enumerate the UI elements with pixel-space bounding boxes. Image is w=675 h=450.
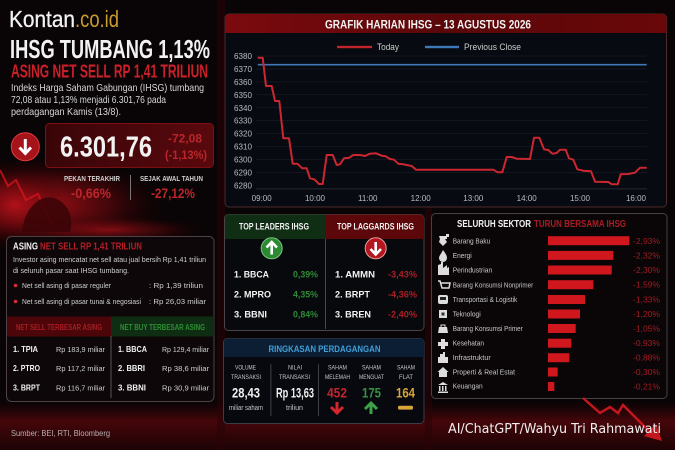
row: infrastruktur: Infrastruktur [453,353,491,362]
x axis labels: 12:00 [411,194,431,203]
stat: saham flat: SAHAM [397,364,415,372]
logo: .co.id [75,6,119,32]
leaders column: TOP LEADERS IHSG [239,222,309,232]
y axis labels: 6380 [234,52,253,61]
y axis labels: 6290 [234,168,253,177]
source: Sumber: BEI, RTI, Bloomberg [11,429,110,438]
legend: Today [377,42,399,52]
table: net buy terbesar: Rp 38,6 miliar [162,364,209,373]
y axis labels: 6370 [234,65,253,74]
leaders column: 4,35% [293,290,318,300]
bullet: reguler: Net sell asing di pasar reguler [22,281,112,290]
x axis labels [252,194,647,203]
row: barang konsumsi primer: -1,05% [633,324,660,334]
table: net sell terbesar: Rp 183,9 miliar [56,345,105,354]
row: perindustrian [438,262,660,275]
stat: volume transaksi: TRANSAKSI [231,374,261,381]
description: di seluruh pasar saat IHSG tumbang. [13,266,129,275]
table: net sell terbesar: 1. TPIA [13,344,38,354]
leaders column [225,214,325,320]
chart heading: GRAFIK HARIAN IHSG – 13 AGUSTUS 2026 [325,20,531,32]
stat: pekan terakhir: PEKAN TERAKHIR [64,174,120,183]
row: transportasi: Transportasi & Logistik [453,295,517,304]
row: barang konsumsi primer [438,324,660,334]
panel heading: TURUN BERSAMA IHSG [534,219,626,230]
legend: Previous Close [464,42,521,52]
leaders column: 3. BBNI [234,310,267,320]
arrow: falling trend [583,398,662,441]
today line [258,58,647,184]
x axis labels: 10:00 [305,194,326,203]
stat: sejak awal tahun: SEJAK AWAL TAHUN [140,174,203,183]
x axis labels: 11:00 [358,194,378,203]
stat: saham flat: 164 [396,384,415,400]
laggards column: 2. BRPT [335,290,370,300]
heading band [224,338,424,357]
laggards column: -4,36% [388,290,417,300]
intro text: 72,08 atau 1,13% menjadi 6.301,76 pada [11,95,166,106]
row: kesehatan [438,338,660,349]
title: IHSG TUMBANG 1,13% [10,34,210,64]
row: keuangan: Keuangan [453,382,483,391]
y axis labels: 6320 [234,130,253,139]
chart heading [225,14,666,33]
row: barang konsumsi nonprimer: -1,59% [633,280,660,290]
leaders column: 2. MPRO [234,290,271,300]
row: properti: Properti & Real Estat [453,368,516,376]
y axis labels: 6340 [234,104,253,113]
x axis labels: 09:00 [252,194,272,203]
y axis labels: 6280 [234,181,253,190]
panel heading: ASING [13,242,38,252]
row: energi [439,250,660,262]
stat: pekan terakhir: -0,66% [71,185,111,201]
row: keuangan: -0,21% [633,382,660,392]
table: net buy terbesar: 2. BBRI [118,363,145,373]
row: infrastruktur [438,352,660,363]
logo [9,6,119,32]
table: net sell terbesar: 3. BRPT [13,382,41,392]
y axis labels: 6330 [234,117,253,126]
panel: top leaders and laggards [224,214,424,330]
row: barang konsumsi nonprimer: Barang Konsumsi Nonprimer [453,280,534,290]
y axis labels: 6360 [234,78,253,87]
stat: saham menguat: SAHAM [362,364,381,372]
table: net sell terbesar [7,316,111,392]
stat: nilai transaksi [276,364,314,412]
row: perindustrian: Perindustrian [453,266,492,274]
row: teknologi [439,309,660,319]
index value box: 6.301,76 [60,132,152,164]
leaders column: 1. BBCA [234,270,269,280]
table: net sell terbesar: Rp 116,7 miliar [56,384,105,392]
row: properti: -0,30% [633,367,660,377]
x axis labels: 13:00 [463,194,484,203]
heading band: RINGKASAN PERDAGANGAN [268,344,381,355]
row: teknologi: Teknologi [453,310,481,318]
stat: pekan terakhir [64,174,120,201]
description [13,255,206,275]
panel heading [13,242,142,252]
row: infrastruktur: -0,88% [633,353,660,363]
panel: line chart [225,14,666,207]
stat: volume transaksi [229,364,263,412]
row: energi: -2,32% [633,250,660,260]
stat: sejak awal tahun [130,174,203,201]
x axis labels: 14:00 [517,194,537,203]
leaders column: 0,39% [293,270,318,280]
icon: down arrow circle [11,133,39,161]
row: barang baku: Barang Baku [453,236,490,246]
stat: nilai transaksi: triliun [286,405,303,412]
laggards column: 3. BREN [335,310,371,320]
table: net sell terbesar: NET SELL TERBESAR ASING [16,323,102,332]
stat: nilai transaksi: Rp 13,63 [276,384,314,400]
credit: AI/ChatGPT/Wahyu Tri Rahmawati [448,422,661,437]
table: net buy terbesar: Rp 129,4 miliar [162,345,209,354]
y axis labels: 6300 [234,156,253,164]
index value box [46,124,214,168]
row: transportasi: -1,33% [633,294,660,304]
stat: saham melemah: 452 [327,384,347,400]
laggards column: -2,40% [388,310,417,320]
panel: asing net sell [6,236,214,402]
row: perindustrian: -2,30% [633,265,660,275]
leaders column: 0,84% [293,310,318,320]
stat: nilai transaksi: TRANSAKSI [279,374,310,381]
panel heading [457,219,626,230]
stat: saham melemah: SAHAM [328,364,347,372]
panel heading: SELURUH SEKTOR [457,219,532,230]
stat: nilai transaksi: NILAI [288,364,302,372]
description: Investor asing mencatat net sell atau jual bersih Rp 1,41 triliun [13,255,206,264]
stat: volume transaksi: miliar saham [229,405,263,412]
stat: sejak awal tahun: -27,12% [151,185,195,201]
bullet: tunai dan negosiasi [14,297,207,306]
stat: saham menguat [359,364,384,414]
intro text [11,83,204,118]
row: kesehatan: Kesehatan [453,338,484,348]
stat: saham menguat: 175 [362,384,381,400]
x axis labels: 15:00 [570,194,591,203]
previous close line [258,64,647,66]
stat: volume transaksi: 28,43 [232,384,260,400]
index value box: -72,08 [168,132,202,146]
row: barang konsumsi primer: Barang Konsumsi Primer [453,324,523,333]
stat: saham melemah [325,364,350,413]
stat: saham flat: FLAT [399,374,413,381]
row: properti [438,367,660,377]
bullet: tunai dan negosiasi: : Rp 26,03 miliar [149,297,207,306]
bullet: reguler [14,281,203,290]
y axis labels: 6350 [234,91,253,100]
laggards column: TOP LAGGARDS IHSG [337,222,414,232]
row: kesehatan: -0,93% [633,338,660,348]
row: energi: Energi [453,251,472,260]
laggards column: -3,43% [388,270,417,280]
y axis labels [234,52,253,190]
row: keuangan [438,382,660,393]
subtitle: ASING NET SELL RP 1,41 TRILIUN [11,62,208,82]
stat: saham melemah: MELEMAH [325,374,350,381]
table: net sell terbesar: 2. PTRO [13,363,40,373]
panel: ringkasan perdagangan [224,338,424,424]
legend [337,42,521,52]
bullet: reguler: : Rp 1,39 triliun [149,281,203,290]
stat: saham menguat: MENGUAT [359,374,384,381]
table: net sell terbesar: Rp 117,2 miliar [56,364,105,373]
y axis labels: 6310 [234,143,253,152]
table: net buy terbesar: 1. BBCA [118,344,147,354]
panel: sektor [432,214,667,398]
bullet: tunai dan negosiasi: Net sell asing di pasar tunai & negosiasi [22,297,141,306]
stat: saham flat [396,364,415,410]
row: barang baku [439,234,660,246]
x axis labels: 16:00 [626,194,647,203]
row: barang baku: -2,93% [633,236,660,246]
index value box: (-1,13%) [165,148,207,162]
logo: Kontan [9,6,75,32]
table: net buy terbesar: NET BUY TERBESAR ASING [120,323,205,332]
stat: volume transaksi: VOLUME [235,364,257,372]
table: net buy terbesar [110,316,214,398]
intro text: Indeks Harga Saham Gabungan (IHSG) tumbang [11,83,204,94]
laggards column: 1. AMMN [335,270,375,280]
table: net buy terbesar: Rp 30,9 miliar [162,384,209,392]
panel heading: NET SELL RP 1,41 TRILIUN [40,242,142,252]
laggards column [325,214,424,329]
table: net buy terbesar: 3. BBNI [118,382,146,392]
row: teknologi: -1,20% [633,309,660,319]
intro text: perdagangan Kamis (13/8). [11,107,121,118]
row: barang konsumsi nonprimer [438,280,660,290]
row: transportasi [438,294,660,304]
